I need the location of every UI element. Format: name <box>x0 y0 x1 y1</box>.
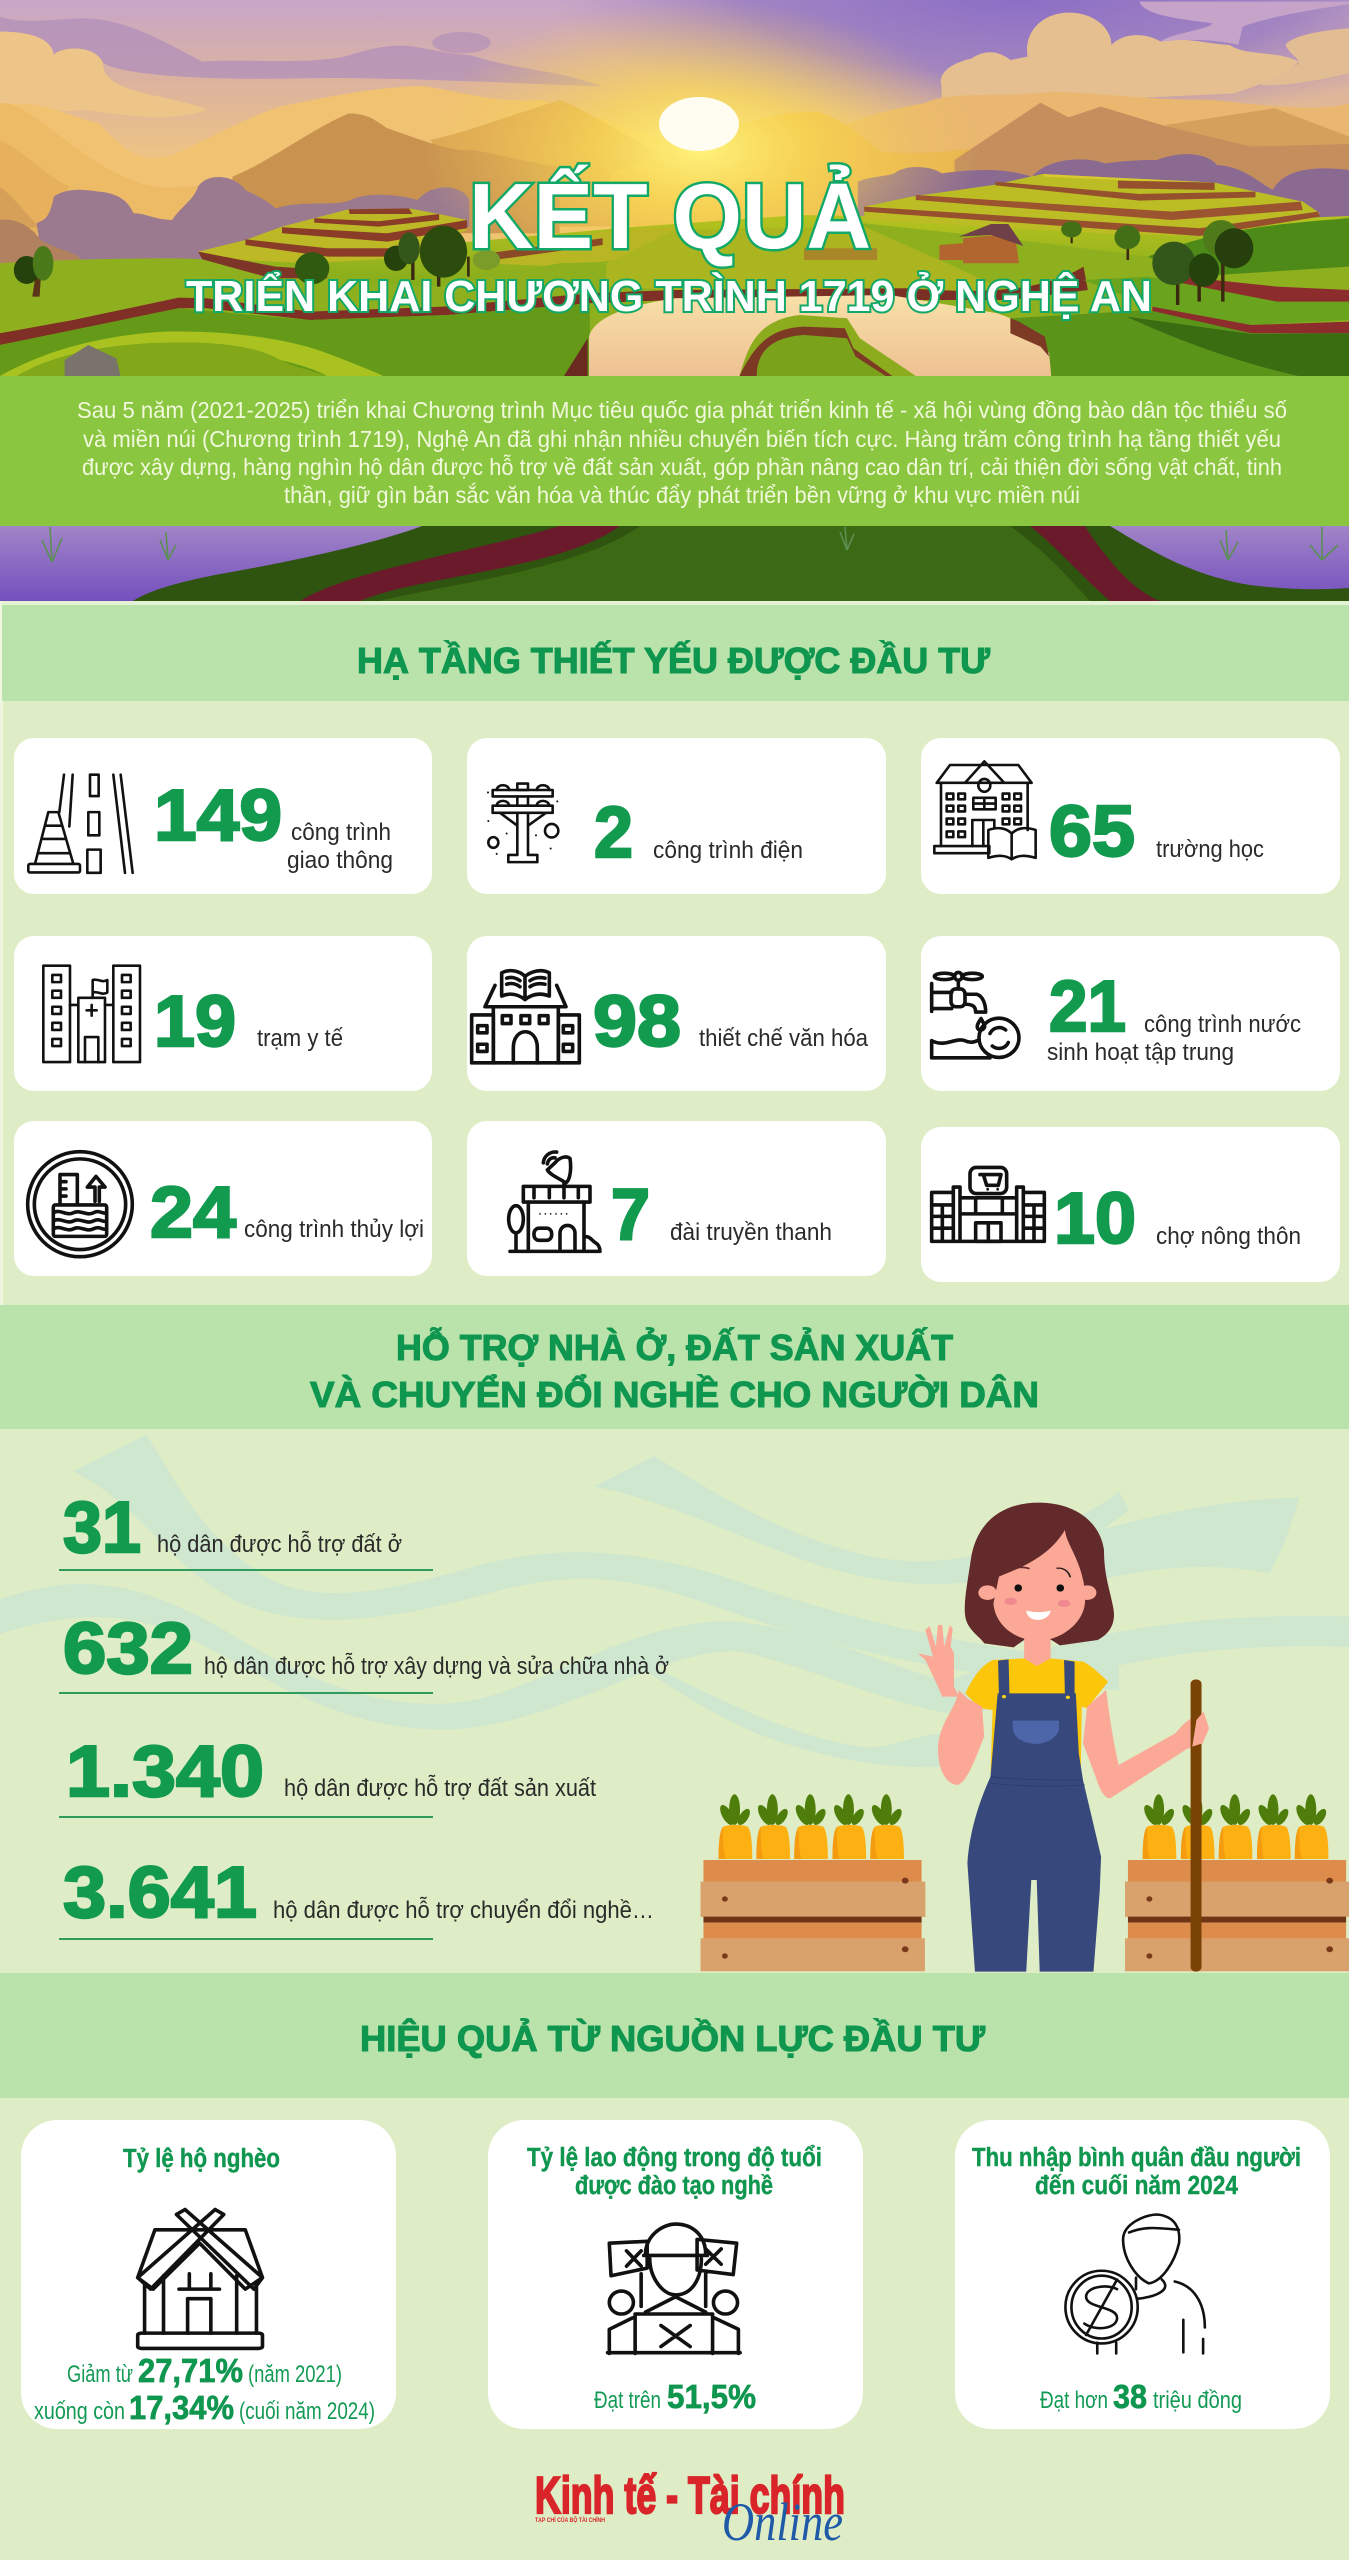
heading: housing and land support <box>0 1305 1349 1429</box>
illustration: farmer with carrots <box>701 1503 1349 1972</box>
logo: Kinh tế - Tài chính Online: Online <box>722 2492 843 2552</box>
card: roads <box>14 738 432 894</box>
card: schools: 65 <box>1049 792 1135 872</box>
card: vocational training: Tỷ lệ lao động trong độ tuổi <box>527 2144 822 2172</box>
heading: investment results: HIỆU QUẢ TỪ NGUỒN LỰC ĐẦU TƯ <box>360 2017 985 2059</box>
training figure: 51,5% <box>667 2378 756 2415</box>
poverty figures: xuống còn <box>34 2398 125 2425</box>
intro text: Sau 5 năm (2021-2025) triển khai Chương trình Mục tiêu quốc gia phát triển kinh tế - xã hội vùng đồng bào dân tộc thiểu số <box>77 397 1287 423</box>
stat: production land: hộ dân được hỗ trợ đất sản xuất <box>284 1775 596 1802</box>
icon: water level <box>28 1152 132 1257</box>
header lower illustration <box>0 526 1349 601</box>
card: radio <box>467 1121 886 1276</box>
income figure: triệu đồng <box>1153 2387 1242 2414</box>
card: income <box>955 2120 1330 2429</box>
card: markets <box>921 1127 1340 1282</box>
card: water supply: 21 <box>1049 967 1126 1047</box>
card: water supply: sinh hoạt tập trung <box>1047 1039 1234 1066</box>
background swooshes <box>0 1434 1349 1767</box>
purple sky glow <box>550 0 1349 130</box>
left terraces <box>0 208 675 376</box>
card: vocational training: được đào tạo nghề <box>575 2172 773 2200</box>
card: radio: đài truyền thanh <box>670 1219 832 1246</box>
poverty figures: (năm 2021) <box>248 2361 342 2388</box>
heading: infrastructure <box>2 605 1349 701</box>
card: poverty rate <box>21 2120 396 2429</box>
edge strip <box>0 601 1349 605</box>
right crate of carrots <box>1125 1794 1349 1971</box>
card: irrigation: 24 <box>150 1173 236 1253</box>
card: culture <box>467 936 886 1091</box>
poverty figures: (cuối năm 2024) <box>239 2398 375 2425</box>
stat: job conversion: 3.641 <box>63 1853 257 1933</box>
poverty figures: 17,34% <box>129 2389 234 2426</box>
card: health stations: trạm y tế <box>257 1025 343 1052</box>
stat: land for housing <box>59 1488 433 1571</box>
stat: housing repair: hộ dân được hỗ trợ xây dựng và sửa chữa nhà ở <box>204 1653 669 1680</box>
heading: infrastructure: HẠ TẦNG THIẾT YẾU ĐƯỢC ĐẦU TƯ <box>357 640 990 681</box>
card: health stations <box>14 936 432 1091</box>
card: roads: giao thông <box>287 847 393 874</box>
logo: Kinh tế - Tài chính Online: TẠP CHÍ CỦA BỘ TÀI CHÍNH <box>535 2516 605 2524</box>
card: culture: thiết chế văn hóa <box>699 1025 868 1052</box>
heading: housing and land support: HỖ TRỢ NHÀ Ở, ĐẤT SẢN XUẤT <box>396 1326 953 1368</box>
hut <box>939 243 963 260</box>
card: markets: 10 <box>1054 1179 1136 1259</box>
stat: job conversion <box>59 1853 654 1940</box>
water paddy <box>589 295 1051 376</box>
card: roads: 149 <box>154 776 282 856</box>
card: schools <box>921 738 1340 894</box>
stat: housing repair <box>59 1609 669 1694</box>
sky <box>0 0 1349 376</box>
card: schools: trường học <box>1156 836 1264 863</box>
icon: workers with signs <box>608 2224 740 2353</box>
card: vocational training <box>488 2120 863 2429</box>
stat: land for housing: hộ dân được hỗ trợ đất ở <box>157 1531 402 1558</box>
poverty figures: 27,71% <box>138 2352 243 2389</box>
logo: Kinh tế - Tài chính Online <box>535 2467 845 2552</box>
intro text: thần, giữ gìn bản sắc văn hóa và thúc đẩy phát triển bền vững ở khu vực miền núi <box>284 482 1080 508</box>
card: electricity: công trình điện <box>653 837 803 864</box>
icon: person with coin <box>1065 2214 1205 2353</box>
icon: road and cone <box>28 775 133 873</box>
card: water supply: công trình nước <box>1144 1011 1301 1038</box>
card: income: Thu nhập bình quân đầu người <box>972 2144 1301 2172</box>
card: radio: 7 <box>611 1175 650 1255</box>
right clouds and mountains <box>610 2 1349 233</box>
stat: production land <box>59 1732 596 1818</box>
card: irrigation: công trình thủy lợi <box>244 1216 424 1243</box>
icon: power pole <box>487 784 558 862</box>
card: electricity <box>467 738 886 894</box>
card: culture: 98 <box>593 982 681 1062</box>
stat: job conversion: hộ dân được hỗ trợ chuyển đổi nghề… <box>273 1897 654 1924</box>
sun glow <box>420 0 980 300</box>
training figure: Đạt trên <box>594 2387 661 2414</box>
income figure: Đạt hơn <box>1040 2387 1108 2414</box>
card: electricity: 2 <box>594 793 633 873</box>
card: irrigation <box>14 1121 432 1276</box>
icon: tap and water cycle <box>932 972 1019 1058</box>
left crate of carrots <box>701 1794 925 1971</box>
left clouds and mountains <box>0 17 675 267</box>
right terraces <box>589 174 1349 376</box>
icon: house with crossed beams <box>138 2210 262 2348</box>
stat: production land: 1.340 <box>66 1732 264 1812</box>
training figure <box>594 2378 756 2415</box>
poverty figures <box>34 2352 375 2426</box>
card: poverty rate: Tỷ lệ hộ nghèo <box>123 2145 280 2173</box>
icon: radio station <box>509 1152 600 1251</box>
card: water supply <box>921 936 1340 1091</box>
card: income: đến cuối năm 2024 <box>1035 2172 1239 2200</box>
title: KẾT QUẢ <box>469 164 871 268</box>
heading: investment results <box>0 1973 1349 2098</box>
logo: Kinh tế - Tài chính Online: Kinh tế - Tài chính <box>535 2467 845 2525</box>
icon: cultural house <box>472 971 579 1063</box>
panel: header illustration <box>0 0 1349 376</box>
heading: housing and land support: VÀ CHUYỂN ĐỔI NGHỀ CHO NGƯỜI DÂN <box>310 1372 1039 1415</box>
sun <box>659 97 739 151</box>
intro text: được xây dựng, hàng nghìn hộ dân được hỗ trợ về đất sản xuất, góp phần nâng cao dân trí, cải thiện đời sống vật chất, tinh <box>82 454 1282 480</box>
poverty figures: Giảm từ <box>67 2361 133 2388</box>
icon: market <box>932 1167 1044 1241</box>
trees left <box>32 277 41 297</box>
farmer <box>918 1503 1209 1972</box>
ground <box>0 215 1349 376</box>
intro text <box>77 397 1287 508</box>
income figure: 38 <box>1113 2378 1147 2415</box>
subtitle: TRIỂN KHAI CHƯƠNG TRÌNH 1719 Ở NGHỆ AN <box>186 270 1152 321</box>
icon: school <box>934 761 1036 859</box>
icon: hospital <box>43 966 140 1062</box>
stat: land for housing: 31 <box>63 1488 141 1568</box>
intro text: và miền núi (Chương trình 1719), Nghệ An đã ghi nhận nhiều chuyển biến tích cực. Hàng trăm công trình hạ tầng thiết yếu <box>83 426 1281 452</box>
stat: housing repair: 632 <box>63 1609 193 1689</box>
panel: intro band <box>0 376 1349 526</box>
income figure <box>1040 2378 1242 2415</box>
card: health stations: 19 <box>154 982 236 1062</box>
trees right <box>1071 232 1073 243</box>
card: markets: chợ nông thôn <box>1156 1223 1301 1250</box>
card: roads: công trình <box>291 819 391 846</box>
